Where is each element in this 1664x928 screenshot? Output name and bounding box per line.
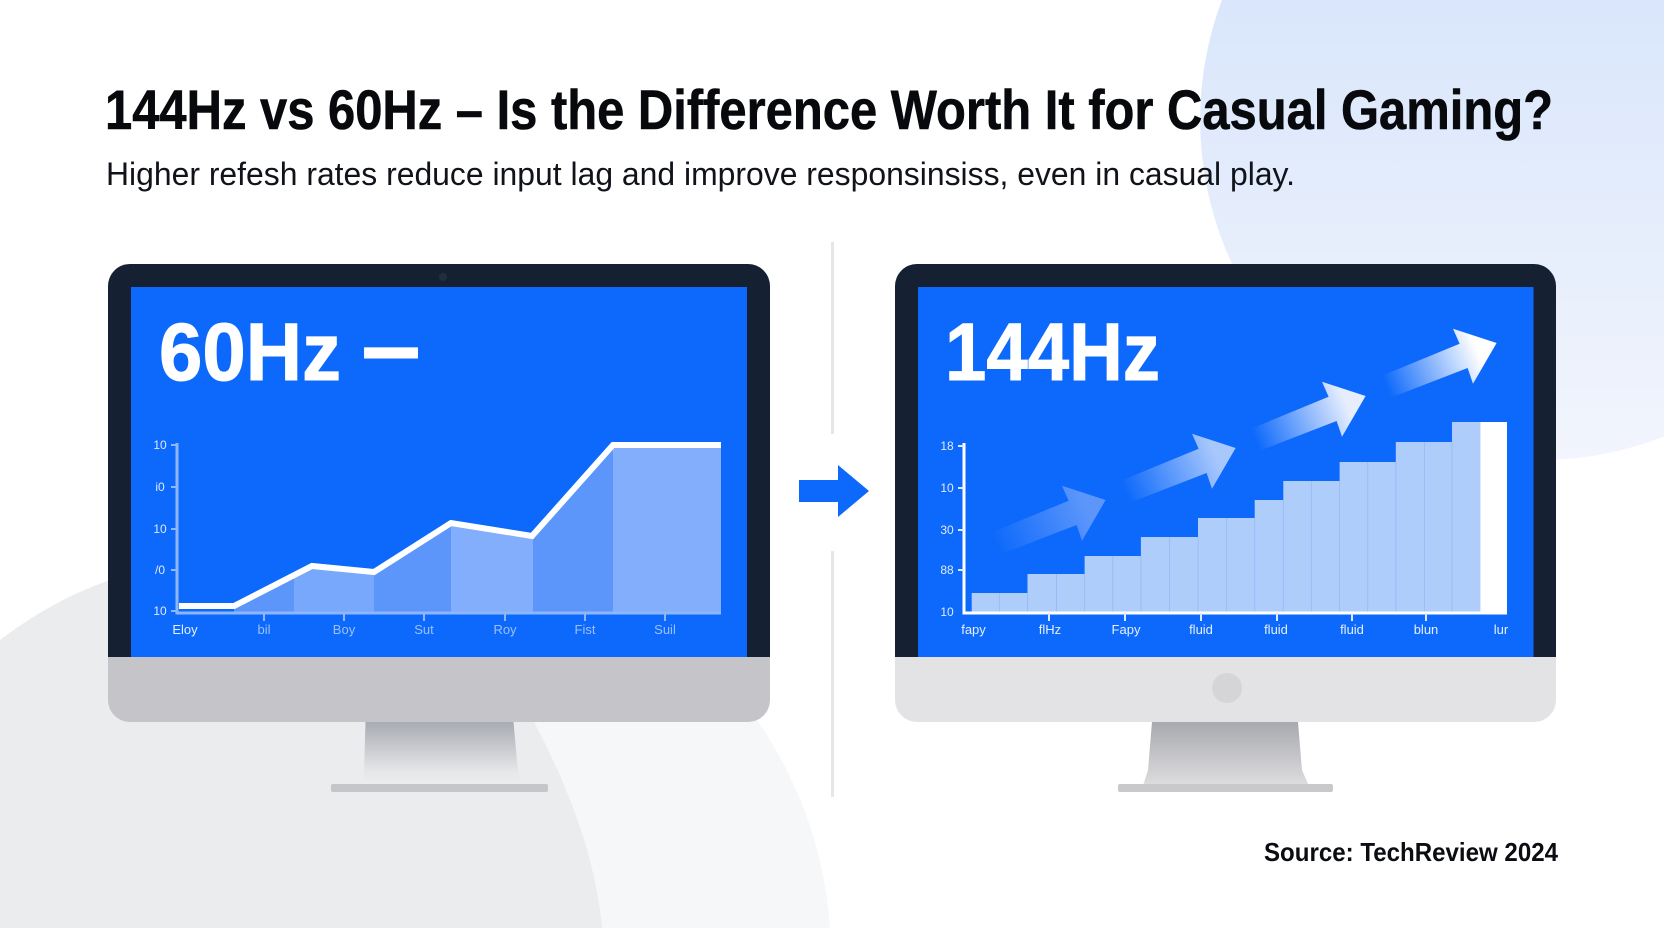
y axis labels: 10 bbox=[153, 438, 167, 452]
bar dividers bbox=[999, 442, 1452, 613]
x axis labels: Boy bbox=[333, 622, 356, 637]
monitor chin bbox=[895, 657, 1556, 722]
x axis labels bbox=[172, 622, 676, 637]
monitor stand bbox=[1144, 722, 1308, 784]
divider: top bbox=[831, 242, 834, 434]
x axis labels: Suil bbox=[654, 622, 676, 637]
y axis labels bbox=[940, 439, 954, 619]
monitor base bbox=[1118, 784, 1333, 792]
x axis labels: fapy bbox=[961, 622, 986, 637]
area chart bbox=[153, 438, 721, 637]
y axis labels: 10 bbox=[940, 481, 954, 495]
monitor bezel bbox=[895, 264, 1556, 657]
x axis labels: flHz bbox=[1039, 622, 1061, 637]
arrow: 60Hz to 144Hz bbox=[799, 465, 869, 517]
x axis labels: blun bbox=[1414, 622, 1438, 637]
divider: bottom bbox=[831, 551, 834, 797]
y axis labels: 30 bbox=[940, 523, 954, 537]
screen bbox=[131, 287, 747, 657]
panel: 60Hz monitor bbox=[108, 264, 770, 792]
axes bbox=[177, 443, 721, 613]
panel: 144Hz monitor bbox=[895, 264, 1556, 792]
x axis labels: bil bbox=[257, 622, 271, 637]
y axis labels: i0 bbox=[155, 480, 165, 494]
axis ticks bbox=[171, 445, 665, 621]
label: 144Hz: 144Hz bbox=[945, 307, 1160, 398]
label: dash: — bbox=[365, 302, 417, 393]
y axis labels: 10 bbox=[153, 522, 167, 536]
axis ticks bbox=[958, 446, 1426, 621]
x axis labels: fluid bbox=[1189, 622, 1213, 637]
data line bbox=[179, 445, 721, 606]
x axis labels: Sut bbox=[414, 622, 434, 637]
area fill segments bbox=[234, 445, 721, 613]
x axis labels: fluid bbox=[1340, 622, 1364, 637]
monitor bezel bbox=[108, 264, 770, 657]
axes bbox=[964, 443, 1507, 613]
monitor base bbox=[331, 784, 548, 792]
monitor stand bbox=[360, 722, 522, 784]
x axis labels: lur bbox=[1494, 622, 1509, 637]
x axis labels: fluid bbox=[1264, 622, 1288, 637]
x axis labels: Fist bbox=[575, 622, 596, 637]
x axis labels: Roy bbox=[493, 622, 517, 637]
highlighted white bar bbox=[1480, 422, 1507, 613]
arrow 4 bbox=[1381, 329, 1497, 398]
source note: Source: TechReview 2024 bbox=[1264, 837, 1558, 867]
x axis labels: Fapy bbox=[1112, 622, 1141, 637]
arrow 1 bbox=[990, 486, 1106, 555]
y axis labels: /0 bbox=[155, 563, 165, 577]
y axis labels: 10 bbox=[940, 605, 954, 619]
bars bbox=[972, 422, 1480, 613]
screen bbox=[918, 287, 1534, 657]
label: 60Hz: 60Hz bbox=[159, 307, 341, 398]
y axis labels: 18 bbox=[940, 439, 954, 453]
y axis labels: 10 bbox=[153, 604, 167, 618]
staircase bar chart bbox=[940, 422, 1509, 637]
rising arrows bbox=[990, 329, 1497, 555]
y axis labels bbox=[153, 438, 167, 618]
webcam bbox=[439, 273, 447, 281]
x axis labels: Eloy bbox=[172, 622, 198, 637]
x axis labels bbox=[961, 622, 1509, 637]
arrow 3 bbox=[1250, 382, 1366, 451]
arrow 2 bbox=[1120, 434, 1236, 503]
logo button bbox=[1212, 673, 1242, 703]
monitor chin bbox=[108, 657, 770, 722]
subtitle: Higher refesh rates reduce input lag and improve responsinsiss, even in casual play. bbox=[106, 156, 1295, 192]
y axis labels: 88 bbox=[940, 563, 954, 577]
